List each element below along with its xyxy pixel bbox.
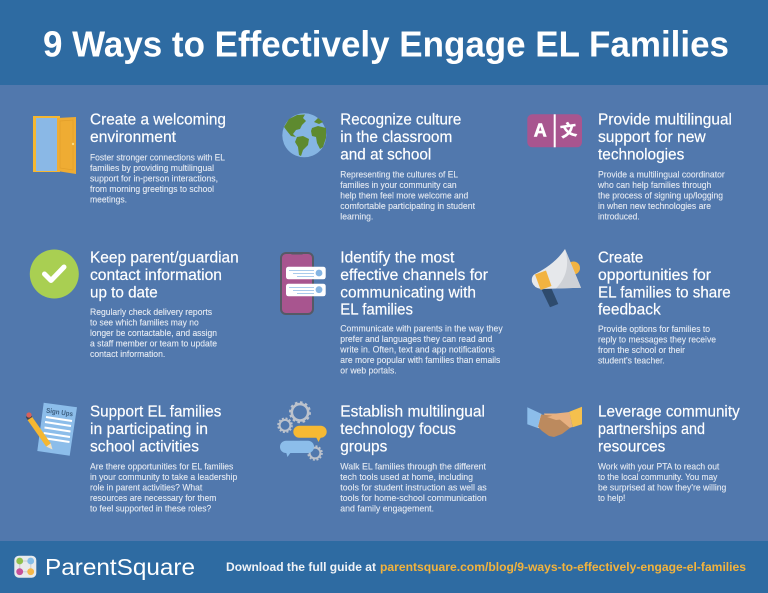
- body text: from morning greetings to school: [90, 184, 214, 194]
- body text: [90, 307, 217, 359]
- body text: [598, 324, 716, 366]
- title: 9 Ways to Effectively Engage EL Families: [43, 24, 729, 64]
- body text: [597, 170, 725, 222]
- body text: [598, 461, 726, 503]
- body text: to the local community. You may: [598, 472, 718, 482]
- heading: Leverage community: [598, 404, 740, 421]
- heading: partnerships and: [598, 421, 705, 438]
- body text: [90, 461, 237, 514]
- icon: handshake: [527, 407, 582, 437]
- panel: community partnerships: [527, 404, 740, 503]
- body text: Are there opportunities for EL families: [90, 461, 234, 471]
- download text: Download the full guide at: [226, 560, 376, 574]
- body text: the process of signing up/logging: [598, 190, 723, 200]
- body text: Walk EL families through the different: [340, 461, 486, 471]
- heading: contact information: [90, 267, 222, 284]
- heading: Identify the most: [340, 249, 455, 266]
- heading: feedback: [598, 302, 661, 319]
- heading: technologies: [598, 147, 685, 164]
- heading: [598, 249, 731, 319]
- icon: globe: [282, 113, 326, 157]
- body text: to see which families may no: [90, 318, 199, 328]
- icon: megaphone: [532, 249, 581, 307]
- panel: support participation in school activities: [26, 403, 237, 514]
- heading: [340, 249, 488, 319]
- body text: contact information.: [90, 349, 165, 359]
- body text: [340, 461, 487, 514]
- body text: Provide options for families to: [598, 324, 710, 334]
- body text: role in parent activities? What: [90, 482, 203, 492]
- heading: school activities: [90, 439, 199, 456]
- body text: and family engagement.: [340, 504, 434, 514]
- body text: in your community to take a leadership: [90, 472, 237, 482]
- heading: Create a welcoming: [90, 112, 226, 129]
- heading: EL families: [340, 302, 413, 319]
- body text: resources are necessary for them: [90, 493, 217, 503]
- heading: in the classroom: [340, 129, 452, 146]
- heading: communicating with: [340, 284, 476, 301]
- logo wordmark: ParentSquare: [45, 554, 195, 580]
- body text: help them feel more welcome and: [340, 190, 468, 200]
- panel: multilingual support for new technologies: [527, 112, 732, 222]
- panel: technology focus groups: [278, 402, 487, 514]
- body text: Provide a multilingual coordinator: [598, 170, 725, 180]
- footer band: [0, 541, 768, 593]
- panel: opportunities to share feedback: [532, 249, 731, 366]
- panel: identify effective channels: [281, 249, 503, 376]
- body text: longer be contactable, and assign: [90, 328, 217, 338]
- body text: or web portals.: [340, 366, 397, 376]
- panel: recognize culture: [282, 112, 475, 222]
- body text: comfortable participating in student: [340, 201, 475, 211]
- heading: in participating in: [90, 421, 208, 438]
- heading: environment: [90, 129, 177, 146]
- heading: up to date: [90, 284, 158, 301]
- body text: prefer and languages they can read and: [340, 334, 492, 344]
- body text: [340, 170, 475, 222]
- heading: [90, 404, 222, 456]
- body text: a staff member or team to update: [90, 338, 217, 348]
- heading: Recognize culture: [340, 112, 461, 129]
- icon: open door: [33, 116, 76, 174]
- icon: gears and speech bubbles: [278, 402, 327, 460]
- heading: [598, 112, 732, 164]
- icon: sign-up sheet and pencil: [26, 403, 77, 456]
- heading: [90, 249, 239, 301]
- icon: translate card: [527, 114, 582, 147]
- body text: from the school or their: [598, 345, 685, 355]
- heading: effective channels for: [340, 267, 488, 284]
- body text: to help!: [598, 493, 625, 503]
- heading: EL families to share: [598, 284, 731, 301]
- body text: [90, 152, 225, 204]
- heading: groups: [340, 439, 388, 456]
- heading: opportunities for: [598, 267, 711, 284]
- heading: support for new: [598, 129, 707, 146]
- heading: Provide multilingual: [598, 112, 732, 129]
- heading: [598, 404, 740, 456]
- body text: [339, 324, 503, 376]
- panel: keep contact information up to date: [30, 249, 239, 359]
- panel: create a welcoming environment: [33, 112, 226, 204]
- heading: and at school: [340, 147, 431, 164]
- body text: families by providing multilingual: [90, 163, 214, 173]
- body text: who can help families through: [597, 180, 711, 190]
- body text: Communicate with parents in the way they: [340, 324, 503, 334]
- body text: Foster stronger connections with EL: [90, 152, 225, 162]
- body text: reply to messages they receive: [598, 334, 716, 344]
- body text: families in your community can: [340, 180, 457, 190]
- icon: sign-up sheet and pencil: Sign Ups: [46, 408, 73, 418]
- body text: are more popular with families than emails: [340, 355, 501, 365]
- body text: to feel supported in these roles?: [90, 504, 211, 514]
- body text: be surprised at how they're willing: [598, 482, 726, 492]
- icon: translate card: 文: [559, 120, 578, 141]
- icon: phone with messages: [281, 252, 326, 314]
- body text: learning.: [340, 212, 373, 222]
- body text: introduced.: [598, 212, 640, 222]
- heading: [340, 112, 461, 164]
- body text: support for in-person interactions,: [90, 174, 218, 184]
- body text: tech tools used at home, including: [340, 472, 473, 482]
- heading: Support EL families: [90, 404, 222, 421]
- heading: technology focus: [340, 421, 456, 438]
- heading: Establish multilingual: [340, 404, 485, 421]
- body text: tools for home-school communication: [340, 493, 487, 503]
- body text: write in. Often, text and app notifications: [339, 345, 495, 355]
- body text: Regularly check delivery reports: [90, 307, 212, 317]
- heading: [340, 404, 485, 456]
- body text: student's teacher.: [598, 356, 665, 366]
- heading: Keep parent/guardian: [90, 249, 239, 266]
- link: parentsquare.com/blog/9-ways-to-effectively-engage-el-families: [380, 560, 746, 574]
- heading: [90, 112, 226, 146]
- heading: Create: [598, 249, 643, 266]
- body text: tools for student instruction as well as: [340, 482, 487, 492]
- header band: [0, 0, 768, 85]
- icon: translate card: A: [534, 120, 547, 140]
- logo mark: [14, 556, 36, 578]
- body text: Representing the cultures of EL: [340, 170, 458, 180]
- heading: resources: [598, 439, 666, 456]
- body text: Work with your PTA to reach out: [598, 461, 720, 471]
- body text: in when new technologies are: [598, 201, 711, 211]
- body text: meetings.: [90, 194, 127, 204]
- icon: check mark: [30, 250, 79, 298]
